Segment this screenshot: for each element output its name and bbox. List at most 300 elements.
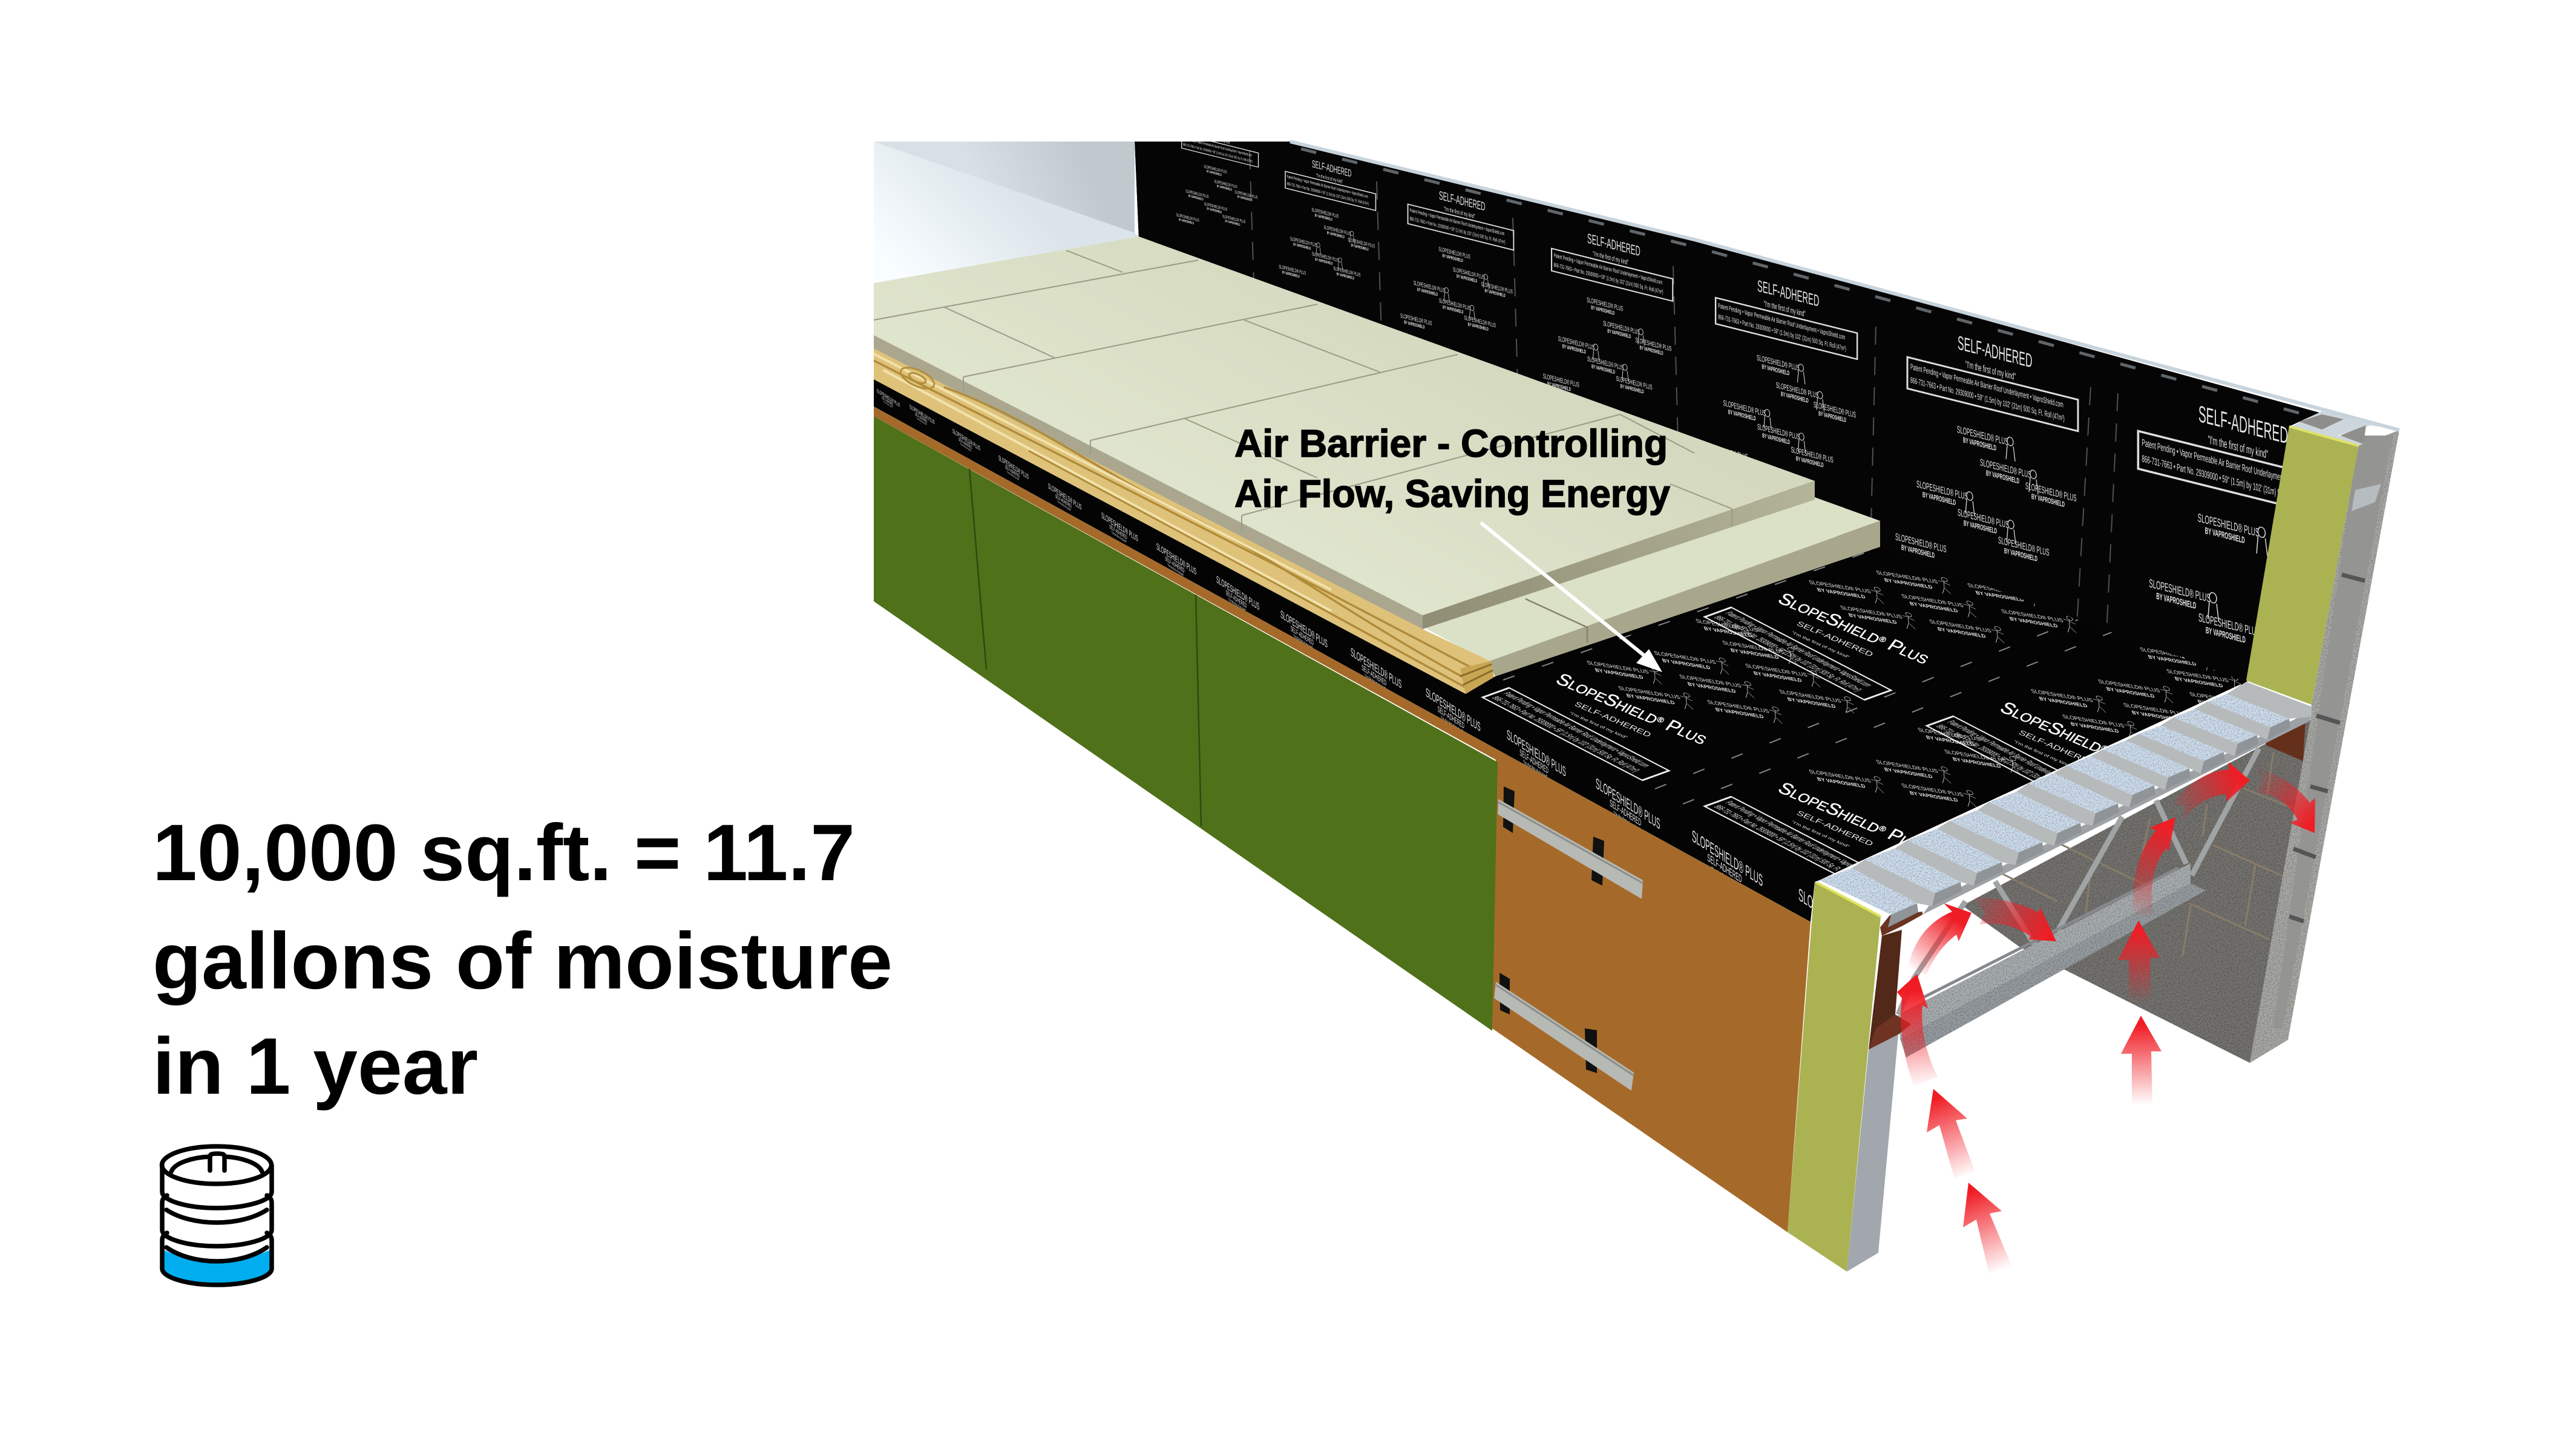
edge strip labels: SELF-ADHERED [882,396,893,407]
wall panel 3: SLOPESHIELD® PLUS [1453,266,1484,281]
wall panel 7: SELF-ADHERED [2198,401,2288,449]
wall panel 5: BY VAPROSHIELD [1762,432,1790,446]
wall panel 3: BY VAPROSHIELD [1457,273,1478,284]
tile 3 logos: SLOPESHIELD® PLUS [1901,593,1965,609]
wall panel 5: SLOPESHIELD® PLUS [1757,422,1800,442]
tile 3 title: ® [1877,635,1889,644]
deck rib sides [1852,682,2312,906]
wall panel 1: BY VAPROSHIELD [1207,169,1222,177]
wall panel 4: SLOPESHIELD® PLUS [1636,336,1671,353]
tile 3 logos: SLOPESHIELD® PLUS [1967,583,2031,598]
tile 4 title: "I'm the first of my kind" [2013,739,2073,768]
edge strip labels: SELF-ADHERED [915,412,927,425]
arrow: rising past the joist [2118,921,2160,1003]
wall panel 1: SELF-ADHERED [1204,123,1238,141]
edge strip labels: SELF-ADHERED [1610,797,1641,829]
arrow: white callout pointer [1481,523,1662,672]
edge strip labels: SLOPESHIELD® PLUS [877,388,900,409]
edge strip labels: SELF-ADHERED [1707,851,1742,886]
wall panel 3: SELF-ADHERED [1439,189,1486,214]
wall panel 7: BY VAPROSHIELD [2205,525,2245,546]
wall panel 5 [1706,264,1857,496]
wall panel 1: SLOPESHIELD® PLUS [1214,179,1237,190]
edge strip labels: SELF-ADHERED [1362,664,1386,688]
tile 3 logos: SLOPESHIELD® PLUS [1840,605,1904,621]
tile 1 logos: SLOPESHIELD® PLUS [1586,660,1650,676]
callout: air barrier: Air Barrier - Controlling [1234,422,1668,465]
deck rib tops [1820,694,2289,915]
tile 3 label box: 866-731-7663 • Part No. 29309000 • 59" (1.5m) by 102' (31m) 500 Sq. Ft. Roll (47m²) [1711,615,1865,693]
tile 4 logos: BY VAPROSHIELD [2070,721,2120,734]
tile 3 logos: BY VAPROSHIELD [2008,616,2059,629]
edge strip labels: SELF-ADHERED [1005,465,1020,479]
edge strip labels: "I'm the first of my kind" [883,400,893,409]
tile 1 logos: SLOPESHIELD® PLUS [1745,663,1809,679]
wall panel 4: SLOPESHIELD® PLUS [1543,372,1579,389]
tile 2 title: ® [1877,824,1889,834]
wall panel 3: BY VAPROSHIELD [1485,288,1506,299]
tile 3 logos: SLOPESHIELD® PLUS [1808,580,1872,595]
tile 1 logos: SLOPESHIELD® PLUS [1695,618,1759,634]
tile 2 logos [1807,727,2024,808]
arrow: rising at column [1897,974,1938,1086]
tile 3 logos: SLOPESHIELD® PLUS [1944,560,2008,575]
statistic text: gallons of moisture [152,916,893,1006]
wall panel 4: SLOPESHIELD® PLUS [1587,296,1623,313]
tile 1 title [1556,674,1706,744]
edge strip labels: SLOPESHIELD® PLUS [1798,884,1876,954]
tile 4 logos: SLOPESHIELD® PLUS [2139,647,2203,662]
tile 1 logos: BY VAPROSHIELD [1594,667,1645,680]
edge strip labels: SLOPESHIELD® PLUS [909,403,935,426]
wall panel 2: SLOPESHIELD® PLUS [1279,264,1306,276]
background: sky above the roof [874,142,1139,283]
wall panel 6: BY VAPROSHIELD [1901,544,1935,560]
tile 4 logos: BY VAPROSHIELD [2147,654,2198,667]
wall panel 7: Patent Pending • Vapor Permeable Air Barrier Roof Underlayment • VaproShield.com [2142,437,2325,494]
tile 1 logos: SLOPESHIELD® PLUS [1617,685,1682,701]
wall panel 2: SLOPESHIELD® PLUS [1290,236,1317,249]
arrow: curving along deck [1973,897,2056,941]
wall panel 7: SLOPESHIELD® PLUS [2123,641,2185,668]
tile 4 logos: SLOPESHIELD® PLUS [2062,714,2126,730]
tile 2 label box: Patent Pending • Vapor Permeable Air Barrier Roof Underlayment • VaproShield.com [1723,800,1875,877]
wall panel 4: BY VAPROSHIELD [1640,345,1663,356]
green facing panels [874,416,1498,1031]
wall panel 2: BY VAPROSHIELD [1315,214,1332,223]
wall panel 1: SLOPESHIELD® PLUS [1204,201,1227,212]
wall panel 2: SLOPESHIELD® PLUS [1311,207,1339,220]
tile 3 label box: Patent Pending • Vapor Permeable Air Barrier Roof Underlayment • VaproShield.com [1723,610,1875,688]
tile 1 logos: BY VAPROSHIELD [1752,670,1803,683]
tile 1 logos: BY VAPROSHIELD [1661,658,1712,670]
wall panel 3: SLOPESHIELD® PLUS [1414,279,1445,294]
wall panel 3: 866-731-7663 • Part No. 29309000 • 59" (1.5m) by 102' (31m) 500 Sq. Ft. Roll (47m²) [1410,216,1506,246]
wall panel 1: SLOPESHIELD® PLUS [1185,189,1209,200]
edge strip labels: SLOPESHIELD® PLUS [952,427,980,452]
wall panel 6: BY VAPROSHIELD [1922,491,1956,508]
wall panel 2: "I'm the first of my kind" [1316,173,1343,185]
tile 2 label box [1705,797,1891,889]
tile 1 title: ® [1655,715,1667,725]
deck rib open ends [1888,719,2290,927]
tile 1 label box: Patent Pending • Vapor Permeable Air Barrier Roof Underlayment • VaproShield.com [1501,691,1653,768]
wall panel 5: SELF-ADHERED [1757,277,1819,310]
wall panel 4: BY VAPROSHIELD [1591,305,1614,316]
wall panel 4: SLOPESHIELD® PLUS [1616,374,1652,391]
rust steel column and seat [1869,912,1922,1050]
wall panel 4: BY VAPROSHIELD [1562,344,1586,355]
wall panel 2: SLOPESHIELD® PLUS [1312,250,1339,264]
callout: air barrier: Air Flow, Saving Energy [1234,472,1670,515]
wall panel 5: SLOPESHIELD® PLUS [1776,381,1818,400]
wall panel 5: BY VAPROSHIELD [1796,455,1824,469]
wall panel 5: Patent Pending • Vapor Permeable Air Barrier Roof Underlayment • VaproShield.com [1718,302,1845,341]
icon: keg with water level [162,1146,272,1285]
wall panel 1: SLOPESHIELD® PLUS [1234,189,1258,200]
wall panel 4: SELF-ADHERED [1587,230,1640,259]
tile 3 title [1774,589,1934,668]
wall panel 7: SLOPESHIELD® PLUS [2149,577,2211,606]
wall panel 2: BY VAPROSHIELD [1282,270,1300,279]
tile 2 logos: BY VAPROSHIELD [1925,734,1976,747]
edge strip labels: SELF-ADHERED [1109,523,1127,541]
wall panel 2: SELF-ADHERED [1312,158,1352,179]
wall panel 5: BY VAPROSHIELD [1762,363,1789,377]
edge strip labels: "I'm the first of my kind" [1613,809,1640,834]
wall panel 7: BY VAPROSHIELD [2206,625,2246,645]
tile 2 logos: SLOPESHIELD® PLUS [1901,783,1965,799]
statistic text: 10,000 sq.ft. = 11.7 [152,808,855,898]
wall panel 1: BY VAPROSHIELD [1237,195,1253,202]
edge strip labels: SLOPESHIELD® PLUS [1280,607,1328,650]
tile 4 logos: BY VAPROSHIELD [2197,699,2247,711]
tile 4 label box: Patent Pending • Vapor Permeable Air Barrier Roof Underlayment • VaproShield.com [1945,719,2097,797]
tile 1 title: LUS [1674,724,1709,747]
tile 4 title: ® [2099,743,2111,753]
wood nailer [874,348,1494,694]
wall panel 3: SLOPESHIELD® PLUS [1464,314,1496,329]
tile 1 logos: BY VAPROSHIELD [1786,696,1837,709]
wall panel 2: SLOPESHIELD® PLUS [1334,266,1361,278]
tile 1 title: "I'm the first of my kind" [1568,711,1628,740]
yellow insulation, right end [2246,426,2359,705]
edge strip labels: SLOPESHIELD® PLUS [1156,541,1196,577]
tile 3 logos: BY VAPROSHIELD [1975,590,2025,603]
tile 4 logos: SLOPESHIELD® PLUS [2189,691,2253,707]
wall panel 3: "I'm the first of my kind" [1444,205,1475,220]
wall panel 4: BY VAPROSHIELD [1547,382,1571,393]
tile 4 title: LUS [2119,753,2154,776]
mounting rail upper [1498,786,1643,899]
tile 4 title: P [2101,742,2130,765]
wall panel 5: SLOPESHIELD® PLUS [1723,399,1766,419]
tile 2 label box: 866-731-7663 • Part No. 29309000 • 59" (1.5m) by 102' (31m) 500 Sq. Ft. Roll (47m²) [1711,804,1865,882]
tile 2 logos: BY VAPROSHIELD [1909,790,1959,803]
tile 1 logos: BY VAPROSHIELD [1625,693,1676,705]
tile 4 title: SELF-ADHERED [2017,729,2097,767]
edge strip labels: "I'm the first of my kind" [1112,530,1127,544]
tile 1 logos: SLOPESHIELD® PLUS [1679,674,1743,690]
galvanized strip below yellow insulation [1847,1034,1898,1272]
steel joist web and bottom chord [1898,748,2259,1057]
wall panel 2: BY VAPROSHIELD [1293,243,1311,252]
tile 2 logos: SLOPESHIELD® PLUS [1917,727,1981,743]
edge strip labels: SELF-ADHERED [1519,748,1549,776]
edge strip labels: SLOPESHIELD® PLUS [1216,573,1259,613]
edge strip labels [877,388,1876,954]
wall panel 7: BY VAPROSHIELD [2156,590,2197,611]
tile 4 title [1996,698,2156,777]
floor tile 2 [1705,727,2024,889]
edge strip labels: "I'm the first of my kind" [960,442,972,452]
wall panel 5: "I'm the first of my kind" [1764,299,1806,319]
wall panel 1: SLOPESHIELD® PLUS [1222,214,1245,225]
edge strip labels: "I'm the first of my kind" [1365,673,1386,692]
black underlayment wall [1135,142,2319,685]
tile 3 logos: BY VAPROSHIELD [1952,567,2002,580]
arrow: rising from below, left [1927,1089,1975,1179]
tile 1 logos: BY VAPROSHIELD [1729,647,1780,660]
wall panel 3: BY VAPROSHIELD [1443,305,1464,315]
wall panel 6: 866-731-7663 • Part No. 29309000 • 59" (1.5m) by 102' (31m) 500 Sq. Ft. Roll (47m²) [1910,376,2065,423]
wall panel 4: "I'm the first of my kind" [1593,250,1628,266]
tile 1 logos [1584,618,1858,725]
arrow: rising from below, lower left [1963,1183,2012,1273]
tile 1 label box: 866-731-7663 • Part No. 29309000 • 59" (1.5m) by 102' (31m) 500 Sq. Ft. Roll (47m²) [1489,695,1643,773]
tile 1 title: SLOPESHIELD [1552,670,1660,727]
wall panel 6: SLOPESHIELD® PLUS [1957,423,2008,448]
edge strip labels: SELF-ADHERED [1055,494,1072,510]
wall panel 6: BY VAPROSHIELD [1986,469,2019,486]
tile 3 logos: BY VAPROSHIELD [1847,612,1898,625]
edge strip labels: SLOPESHIELD® PLUS [1507,726,1566,780]
mounting rail lower [1494,973,1634,1091]
tile 4 title: SLOPESHIELD [1996,698,2105,755]
tile 2 logos: BY VAPROSHIELD [1952,756,2002,769]
tile 1 label box [1483,688,1669,780]
edge strip labels: "I'm the first of my kind" [1441,715,1463,736]
tile 1 logos: SLOPESHIELD® PLUS [1653,650,1717,666]
wall panel 3: SLOPESHIELD® PLUS [1439,297,1470,312]
tile 2 logos: BY VAPROSHIELD [1883,766,1934,779]
tile 4 label box: 866-731-7663 • Part No. 29309000 • 59" (1.5m) by 102' (31m) 500 Sq. Ft. Roll (47m²) [1933,724,2087,802]
tile 1 logos: SLOPESHIELD® PLUS [1778,689,1843,705]
wall panel 2: BY VAPROSHIELD [1327,231,1345,240]
wall panel 3: SLOPESHIELD® PLUS [1400,312,1432,327]
wall panel 4: BY VAPROSHIELD [1621,384,1644,395]
wall panel 6: SLOPESHIELD® PLUS [2025,480,2077,504]
floor tile 3 [1705,557,2080,700]
callout: air barrier [1234,422,1670,515]
rigid insulation boards [874,237,1880,676]
edge strip labels: SELF-ADHERED [1225,588,1247,610]
edge strip labels: SELF-ADHERED [959,437,972,451]
tile 1 logos: SLOPESHIELD® PLUS [1706,699,1771,715]
wall panel 1: Patent Pending • Vapor Permeable Air Barrier Roof Underlayment • VaproShield.com [1183,136,1252,158]
wall panel 7 [2123,382,2343,717]
arrow: curving down at block wall [2255,768,2315,833]
tile 1 logos: BY VAPROSHIELD [1703,626,1754,638]
masonry block wall, inner face [1962,720,2310,1063]
tile 4 logos: SLOPESHIELD® PLUS [2166,668,2230,684]
arrow: curving toward block wall [2172,762,2250,821]
tile 3 logos: SLOPESHIELD® PLUS [1875,570,1939,586]
edge strip labels: SELF-ADHERED [1165,555,1185,575]
floor tile 4 [1927,644,2269,809]
wall panel 4: BY VAPROSHIELD [1607,328,1631,340]
arrow: curving to deck [1908,903,1971,975]
tile 1 logos: BY VAPROSHIELD [1686,681,1737,694]
wall panel 7: BY VAPROSHIELD [2131,654,2171,675]
wall panel 7: 866-731-7663 • Part No. 29309000 • 59" (1.5m) by 102' (31m) 500 Sq. Ft. Roll (47m²) [2142,452,2327,510]
edge strip labels: "I'm the first of my kind" [1007,470,1020,482]
wall panel 5: BY VAPROSHIELD [1711,452,1738,466]
tile 1 logos: BY VAPROSHIELD [1714,707,1765,719]
wall panel 6: SLOPESHIELD® PLUS [1980,456,2031,480]
tile 2 title: P [1879,823,1908,846]
wall panel 6: SLOPESHIELD® PLUS [1916,478,1968,502]
tile 3 logos: BY VAPROSHIELD [1936,626,1987,639]
tile 3 logos: BY VAPROSHIELD [1883,577,1934,590]
statistic text: in 1 year [152,1022,478,1111]
wall top edge [1290,142,2399,430]
edge strip labels: SLOPESHIELD® PLUS [1596,776,1660,834]
wall panel 2: BY VAPROSHIELD [1315,258,1332,266]
wall panel 4: BY VAPROSHIELD [1591,364,1615,376]
wall panel 6: SLOPESHIELD® PLUS [1958,506,2009,531]
tile 3 logos: BY VAPROSHIELD [1909,601,1959,613]
edge strip labels: "I'm the first of my kind" [1167,563,1184,578]
tile 2 logos: BY VAPROSHIELD [1816,776,1867,789]
wall panel 1: BY VAPROSHIELD [1217,184,1232,192]
tile 4 logos: BY VAPROSHIELD [2174,676,2224,688]
tile 1 logos: SLOPESHIELD® PLUS [1722,640,1786,656]
tile 3 logos [1807,557,2080,644]
edge strip labels: SLOPESHIELD® PLUS [998,454,1029,481]
wall panel 1: SLOPESHIELD® PLUS [1204,164,1227,175]
arrow: curving upward through web [2132,817,2175,915]
wall panel 4: SLOPESHIELD® PLUS [1603,319,1639,336]
tile 3 logos: BY VAPROSHIELD [1816,587,1867,599]
edge strip labels: SLOPESHIELD® PLUS [1692,827,1763,890]
edge strip labels: "I'm the first of my kind" [1057,499,1071,512]
edge strip labels: "I'm the first of my kind" [1523,758,1547,781]
wall panel 6 [1895,317,2078,596]
tile 1 title: P [1657,714,1686,737]
tile 1 title: SELF-ADHERED [1573,701,1653,739]
statistic text [152,808,893,1111]
tile 3 title: SLOPESHIELD [1774,589,1883,646]
tile 2 title: SLOPESHIELD [1774,779,1883,835]
tile 4 logos: SLOPESHIELD® PLUS [2097,679,2161,694]
edge strip labels: SLOPESHIELD® PLUS [1426,685,1481,734]
edge strip labels: "I'm the first of my kind" [1711,864,1740,891]
tile 3 title: LUS [1896,644,1932,667]
wall panel 6: BY VAPROSHIELD [1963,436,1996,453]
tile 4 logos: SLOPESHIELD® PLUS [2123,702,2187,718]
wall panel 3 [1400,180,1513,353]
wall panel 6: BY VAPROSHIELD [2004,547,2037,564]
wall panel 3: SLOPESHIELD® PLUS [1438,246,1470,260]
tile 2 title: "I'm the first of my kind" [1791,820,1850,849]
tile 2 logos: SLOPESHIELD® PLUS [1875,759,1939,775]
edge strip labels: SELF-ADHERED [1438,705,1464,731]
edge strip labels: SLOPESHIELD® PLUS [1101,511,1138,544]
wall panel 4: SLOPESHIELD® PLUS [1558,335,1594,351]
tile 4 logos: BY VAPROSHIELD [2131,710,2181,722]
tile 2 logos: SLOPESHIELD® PLUS [1944,749,2008,765]
wall panel 2: SLOPESHIELD® PLUS [1324,224,1351,237]
wall panel 7: SLOPESHIELD® PLUS [2198,512,2259,540]
tile 4 logos: BY VAPROSHIELD [2038,696,2089,708]
wall panel 7: "I'm the first of my kind" [2208,434,2268,462]
wall panel 2: BY VAPROSHIELD [1351,243,1369,252]
wall panel 1 [1176,116,1259,241]
wall panel 7: SLOPESHIELD® PLUS [2198,611,2260,639]
wall panel 4 [1543,220,1673,418]
edge strip labels: SELF-ADHERED [1291,624,1314,647]
wall panel 5: SLOPESHIELD® PLUS [1706,442,1748,462]
tile 4 label box [1927,716,2113,809]
corrugated metal deck [1820,682,2312,927]
red air-flow arrows [1897,762,2315,1273]
lower insulation layer [1423,497,1880,676]
wall panel 1: 866-731-7663 • Part No. 29309000 • 59" (1.5m) by 102' (31m) 500 Sq. Ft. Roll (47m²) [1183,142,1253,165]
deck bottom plate [1922,711,2312,915]
black underlayment floor and edge strip [874,379,2269,954]
wall panel 3: BY VAPROSHIELD [1404,320,1425,330]
tile 4 logos: SLOPESHIELD® PLUS [2030,688,2094,704]
wall panel 6: SLOPESHIELD® PLUS [1895,531,1947,555]
tile 3 title: SELF-ADHERED [1795,620,1875,658]
tile 3 logos: SLOPESHIELD® PLUS [1929,619,1993,635]
wall panel 3: Patent Pending • Vapor Permeable Air Barrier Roof Underlayment • VaproShield.com [1410,208,1505,237]
tile 3 logos: SLOPESHIELD® PLUS [2001,609,2065,624]
wall panel 5: SLOPESHIELD® PLUS [1814,400,1856,420]
edge strip labels: SLOPESHIELD® PLUS [1351,645,1401,691]
wall panel 5: SLOPESHIELD® PLUS [1757,353,1799,373]
wall panel 5: SLOPESHIELD® PLUS [1791,445,1834,465]
edge strip labels: "I'm the first of my kind" [1228,598,1246,613]
wall panel 1: BY VAPROSHIELD [1179,218,1194,225]
wall panel 2: SLOPESHIELD® PLUS [1348,237,1375,249]
wall panel 5: 866-731-7663 • Part No. 29309000 • 59" (1.5m) by 102' (31m) 500 Sq. Ft. Roll (47m²) [1718,313,1846,353]
wall panel 4: SLOPESHIELD® PLUS [1587,355,1624,371]
arrow: rising beneath the wall [2121,1016,2161,1105]
tile 2 logos: SLOPESHIELD® PLUS [1808,769,1872,785]
tile 3 label box [1705,607,1891,700]
wall panel 2 [1279,150,1375,298]
yellow insulation, front end [1788,882,1881,1272]
wall panel 1: BY VAPROSHIELD [1225,219,1240,227]
wall panel 4: 866-731-7663 • Part No. 29309000 • 59" (1.5m) by 102' (31m) 500 Sq. Ft. Roll (47m²) [1554,261,1663,296]
tile 2 title: LUS [1896,833,1932,856]
wall panel 5: BY VAPROSHIELD [1818,410,1846,424]
wall panel 2: 866-731-7663 • Part No. 29309000 • 59" (1.5m) by 102' (31m) 500 Sq. Ft. Roll (47m²) [1287,182,1369,207]
tile 4 logos [2028,644,2269,739]
wall panel 6: SELF-ADHERED [1958,332,2032,372]
wall panel 4: Patent Pending • Vapor Permeable Air Barrier Roof Underlayment • VaproShield.com [1554,252,1662,286]
wall panel 5: BY VAPROSHIELD [1781,391,1809,404]
tile 2 title: SELF-ADHERED [1795,809,1875,848]
wall panel 6: "I'm the first of my kind" [1965,358,2016,382]
orange sheathing board [874,407,1811,1232]
tile 3 title: "I'm the first of my kind" [1791,630,1850,659]
wall panel 1: BY VAPROSHIELD [1207,206,1222,214]
edge strip labels: "I'm the first of my kind" [916,416,927,426]
wall panel 6: Patent Pending • Vapor Permeable Air Barrier Roof Underlayment • VaproShield.com [1910,362,2063,410]
